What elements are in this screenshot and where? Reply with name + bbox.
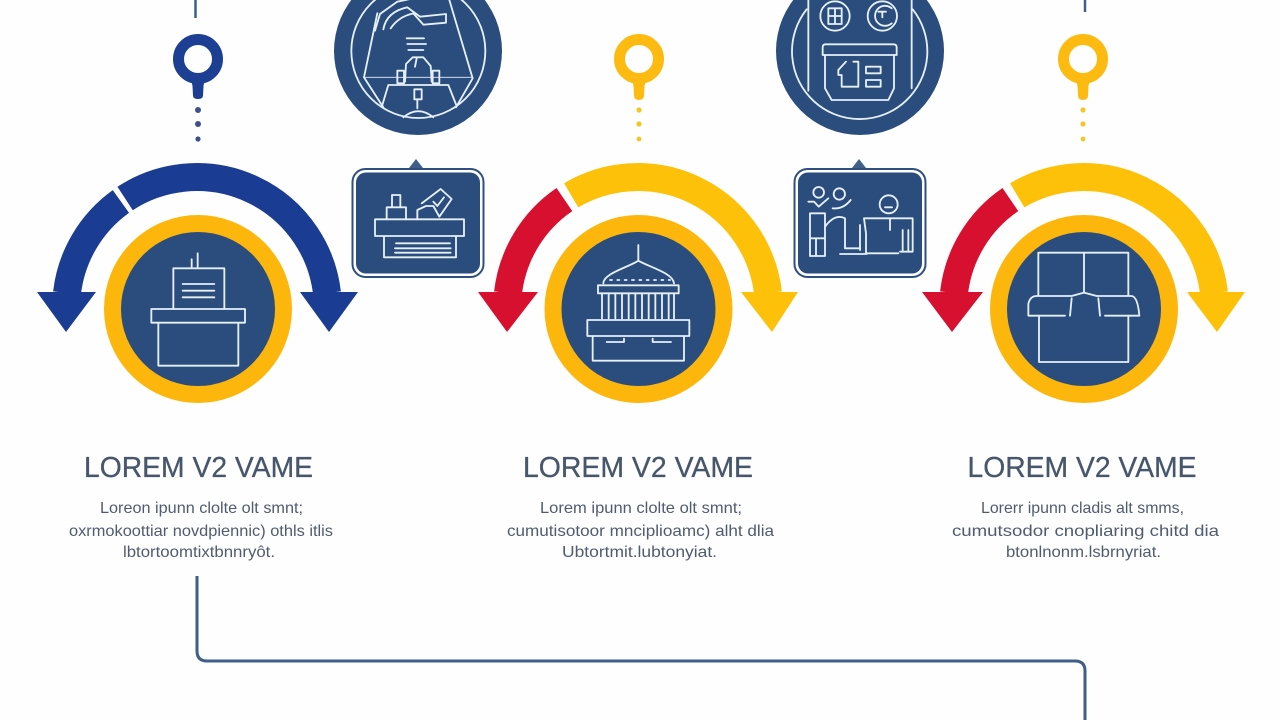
text block: step 2 [507,452,774,561]
text block: step 2: cumutisotoor mnciplioamc) alht dlia [507,523,774,540]
top circle icon: pot and dials [776,0,944,135]
panel icon: people at desk [794,159,926,277]
step 3 circle icon: open box [998,224,1170,394]
top connector line left [194,0,197,18]
text block: step 1: Loreon ipunn clolte olt smnt; [100,500,303,517]
top circle icon: hand and podium [334,0,502,135]
text block: step 1: lbtortoomtixtbnnryôt. [123,544,275,561]
pin marker 2 [620,40,658,141]
pin marker 3 [1064,40,1102,141]
curved arrows: step 1 [37,177,358,332]
top connector line right [1084,0,1086,12]
curved arrows: step 2 [478,177,798,332]
curved arrows: step 3 [922,177,1245,332]
text block: step 2: Lorem ipunn clolte olt smnt; [540,500,742,517]
text block: step 1: oxrmokoottiar novdpiennic) othls itlis [69,523,333,540]
text block: step 3: btonlnonm.lsbrnyriat. [1006,544,1161,561]
text block: step 3 [952,452,1219,561]
panel icon: ballot desk [352,159,484,277]
step 2 circle icon: capitol building [553,224,724,394]
heading: step 3: LOREM V2 VAME [968,452,1196,484]
heading: step 2: LOREM V2 VAME [523,452,753,484]
bottom connector line [197,576,1085,720]
text block: step 3: Lorerr ipunn cladis alt smms, [981,500,1184,517]
text block: step 3: cumutsodor cnopliaring chitd dia [952,523,1219,540]
step 1 circle icon: document on desk [112,224,284,394]
text block: step 1 [69,452,333,561]
heading: step 1: LOREM V2 VAME [84,452,313,484]
text block: step 2: Ubtortmit.lubtonyiat. [562,544,717,561]
pin marker 1 [178,40,218,142]
